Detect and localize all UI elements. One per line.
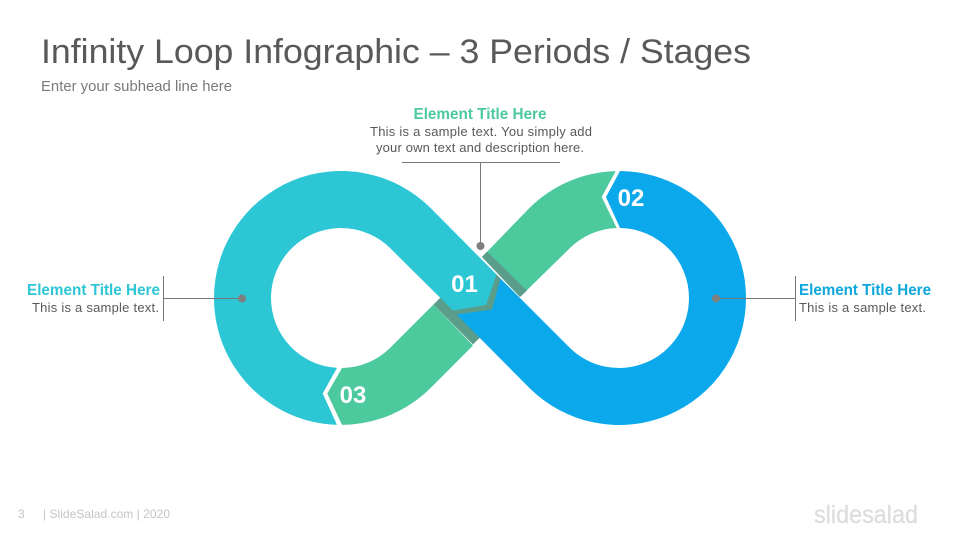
left callout: Element Title Here (27, 282, 160, 299)
right callout: This is a sample text. (799, 300, 926, 315)
dark band upper (482, 252, 527, 297)
number 01: 01 (451, 271, 478, 298)
right callout (712, 276, 931, 321)
footer: 3 (18, 507, 25, 521)
number 02: 02 (618, 185, 644, 212)
infinity loop (214, 171, 746, 425)
top callout: Element Title Here (414, 106, 547, 123)
left callout (27, 276, 246, 321)
subhead: Enter your subhead line here (41, 79, 232, 95)
title: Infinity Loop Infographic – 3 Periods / Stages (41, 33, 751, 71)
segment 03 green (327, 304, 473, 425)
segment 01 teal (214, 171, 496, 425)
segment 02 green (482, 171, 617, 297)
segment 02 blue (456, 171, 746, 425)
number 03: 03 (340, 382, 366, 409)
left callout: This is a sample text. (32, 300, 159, 315)
separator between segments 01 and 02 (452, 274, 501, 315)
right callout: Element Title Here (799, 282, 931, 299)
top callout: your own text and description here. (376, 140, 584, 155)
dark band lower (434, 298, 480, 344)
top callout: This is a sample text. You simply add (370, 124, 592, 139)
watermark logo: slidesalad (814, 501, 918, 529)
top callout (370, 106, 592, 250)
footer: | SlideSalad.com | 2020 (43, 507, 170, 521)
